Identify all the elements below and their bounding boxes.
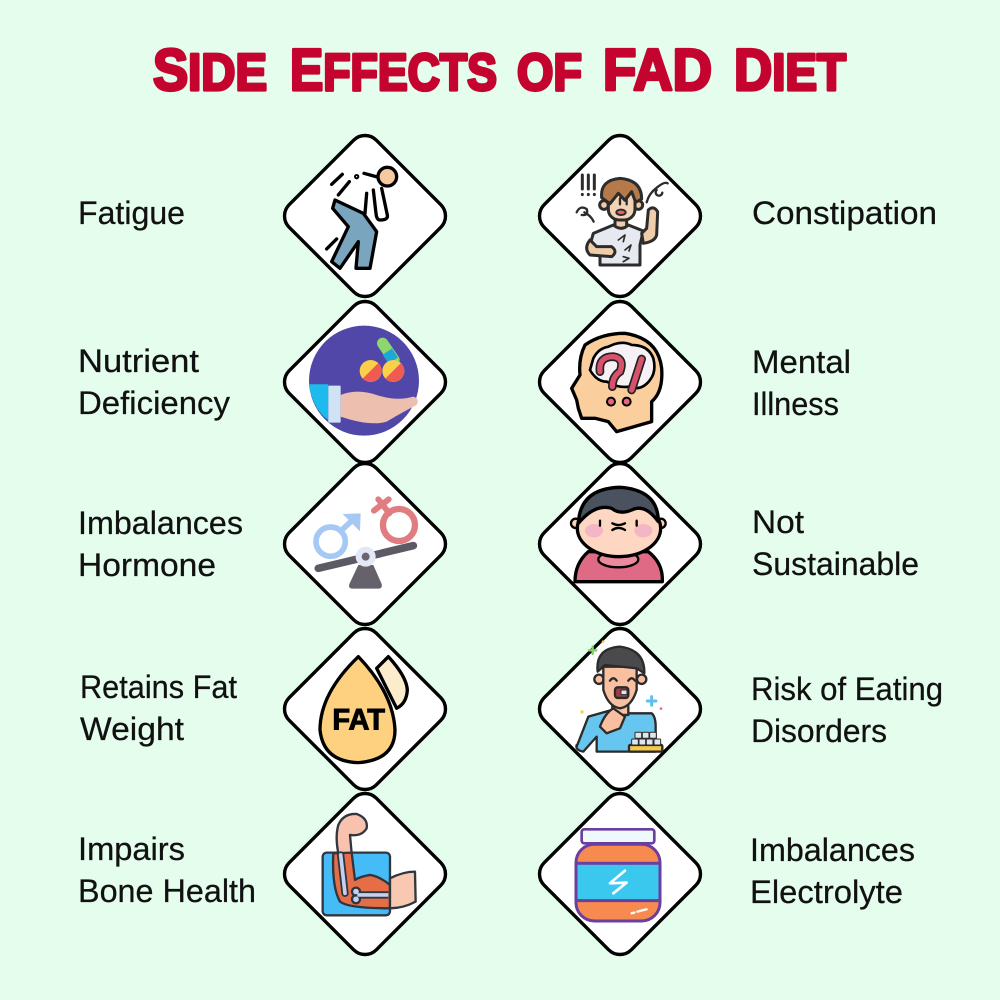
label: Fatigue [78, 195, 185, 231]
panel: impairs bone health: Bone Health [78, 873, 256, 909]
label: Imbalances [750, 832, 915, 868]
icon: fat drops: FAT [332, 703, 385, 736]
title: SIDE [153, 38, 267, 103]
panel: imbalances hormone: Hormone [78, 547, 216, 583]
label: Not [752, 504, 804, 540]
diamond frame [533, 622, 707, 796]
icon: gender symbols on seesaw [316, 499, 415, 589]
diamond frame [533, 787, 707, 961]
diamond frame [278, 622, 452, 796]
panel: retains fat weight: Weight [80, 711, 184, 747]
icon: arm muscle and bones [323, 814, 416, 915]
title: FAD [603, 38, 712, 103]
icon: tired bent person [327, 167, 397, 268]
panel: imbalances electrolyte [533, 787, 915, 961]
diamond frame [533, 457, 707, 631]
label: Imbalances [78, 505, 243, 541]
panel: fatigue [78, 129, 452, 303]
diamond frame [278, 129, 452, 303]
panel: imbalances hormone [78, 457, 452, 631]
icon: electrolyte jar [576, 829, 660, 921]
label: Nutrient [78, 343, 199, 379]
icon: chubby child [571, 487, 666, 582]
icon: fat drops [320, 657, 407, 763]
panel: risk of eating disorders [533, 622, 943, 796]
label: Impairs [78, 831, 185, 867]
icon: head with question mark [572, 333, 662, 432]
panel: constipation [533, 129, 937, 303]
label: Risk of Eating [751, 671, 943, 707]
panel: risk of eating disorders: Disorders [751, 713, 887, 749]
icon: pills over hand [309, 326, 419, 436]
panel: nutrient deficiency [78, 295, 452, 469]
label: Mental [752, 344, 851, 380]
panel: impairs bone health [78, 787, 452, 961]
diamond frame [278, 295, 452, 469]
title [153, 38, 846, 103]
label: Constipation [752, 195, 937, 231]
panel: not sustainable [533, 457, 919, 631]
title: OF [517, 44, 582, 102]
diamond frame [278, 787, 452, 961]
panel: mental illness [533, 295, 851, 469]
label: Retains Fat [80, 669, 237, 705]
icon: distressed person [577, 175, 668, 265]
panel: nutrient deficiency: Deficiency [78, 385, 230, 421]
panel: mental illness: Illness [752, 386, 839, 422]
panel: imbalances electrolyte: Electrolyte [750, 874, 903, 910]
diamond frame [533, 129, 707, 303]
panel: retains fat weight [80, 622, 452, 796]
diamond frame [533, 295, 707, 469]
diamond frame [278, 457, 452, 631]
title: EFFECTS [290, 38, 497, 103]
icon: person eating sugar cubes [576, 640, 662, 752]
panel: not sustainable: Sustainable [752, 546, 919, 582]
title: DIET [734, 38, 846, 103]
